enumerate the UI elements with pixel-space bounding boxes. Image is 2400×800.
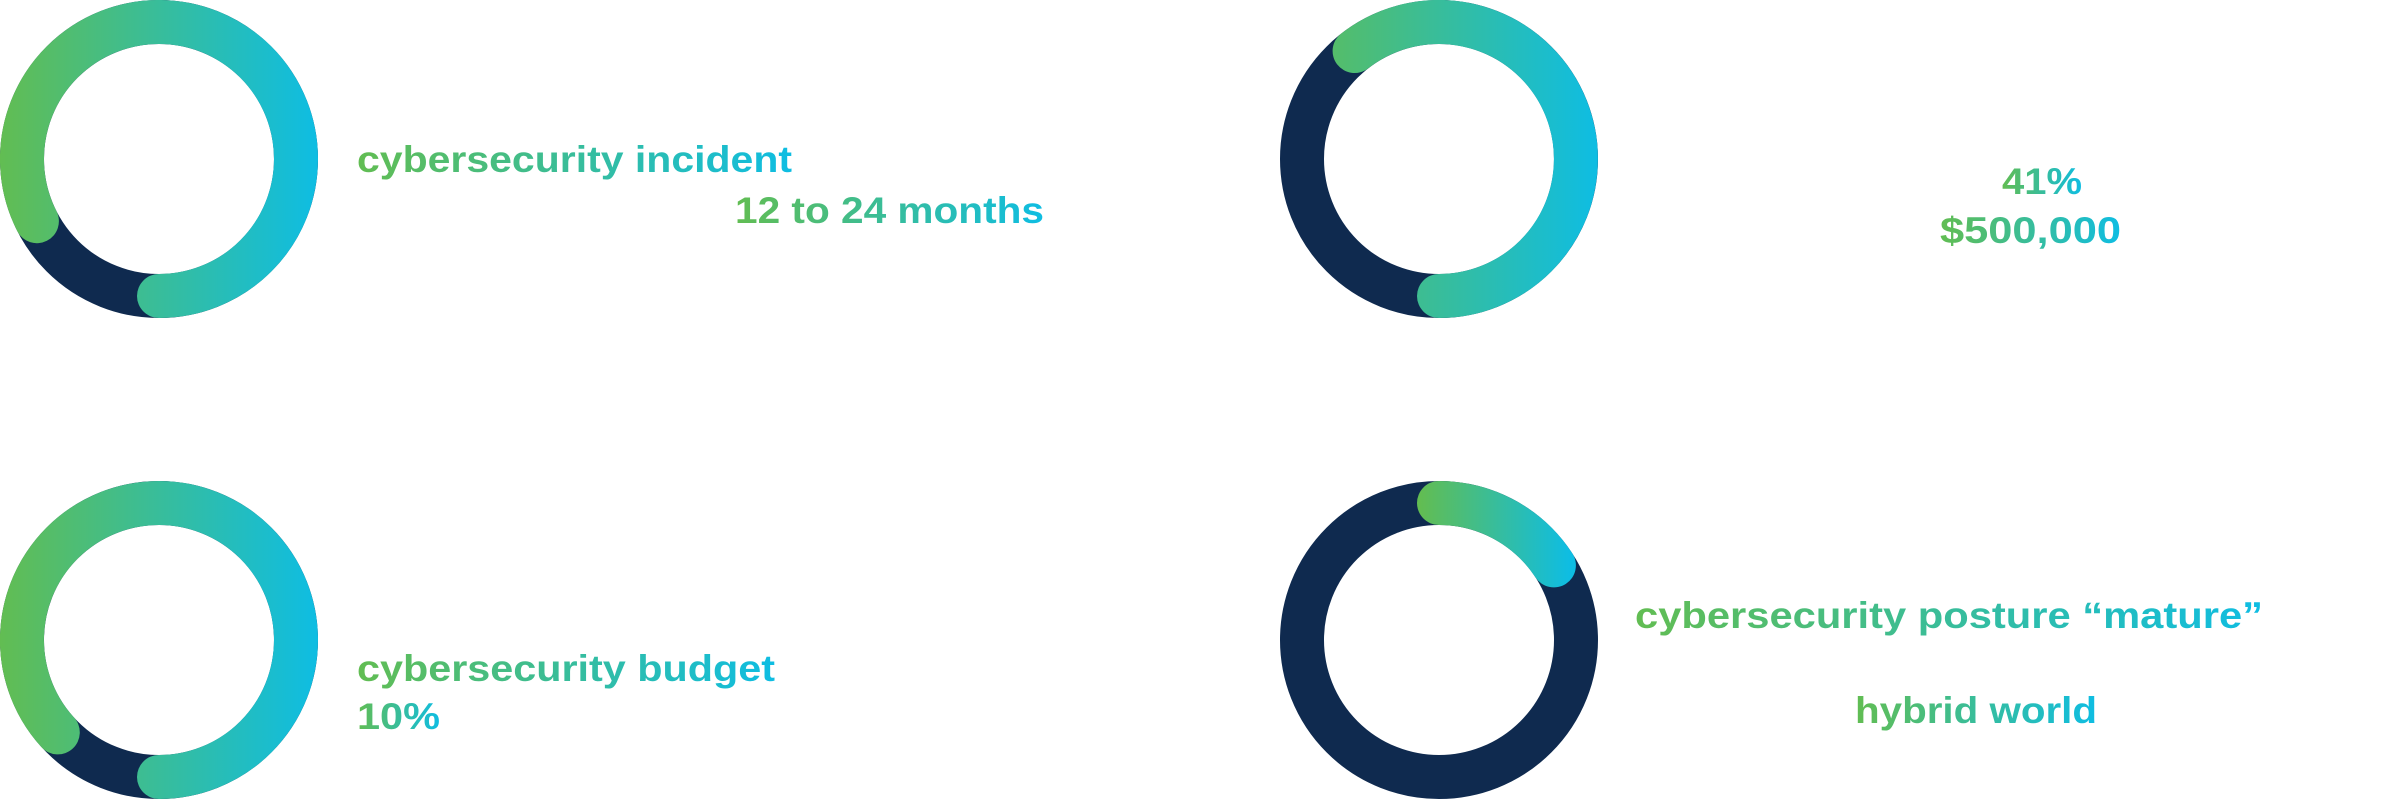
text: cybersecurity incident xyxy=(357,139,1044,231)
text: cybersecurity budget: cybersecurity budget xyxy=(357,648,775,689)
donut 4: mature posture xyxy=(1302,503,1576,777)
text: 41% $500,000 xyxy=(1940,161,2121,251)
donut 2: cost xyxy=(1302,22,1576,296)
text: 41% $500,000: $500,000 xyxy=(1940,210,2121,251)
text: cybersecurity incident: 12 to 24 months xyxy=(735,190,1044,231)
text: cybersecurity posture mature: hybrid world xyxy=(1855,690,2097,731)
donut 1: incident xyxy=(22,22,296,296)
text: cybersecurity budget: 10% xyxy=(357,696,440,737)
text: cybersecurity posture mature xyxy=(1635,595,2263,731)
donut 3: budget xyxy=(22,503,296,777)
text: cybersecurity posture mature: cybersecurity posture “mature” xyxy=(1635,595,2263,636)
text: cybersecurity incident: cybersecurity incident xyxy=(357,139,792,180)
text: 41% $500,000: 41% xyxy=(2002,161,2082,202)
text: cybersecurity budget xyxy=(357,648,775,737)
